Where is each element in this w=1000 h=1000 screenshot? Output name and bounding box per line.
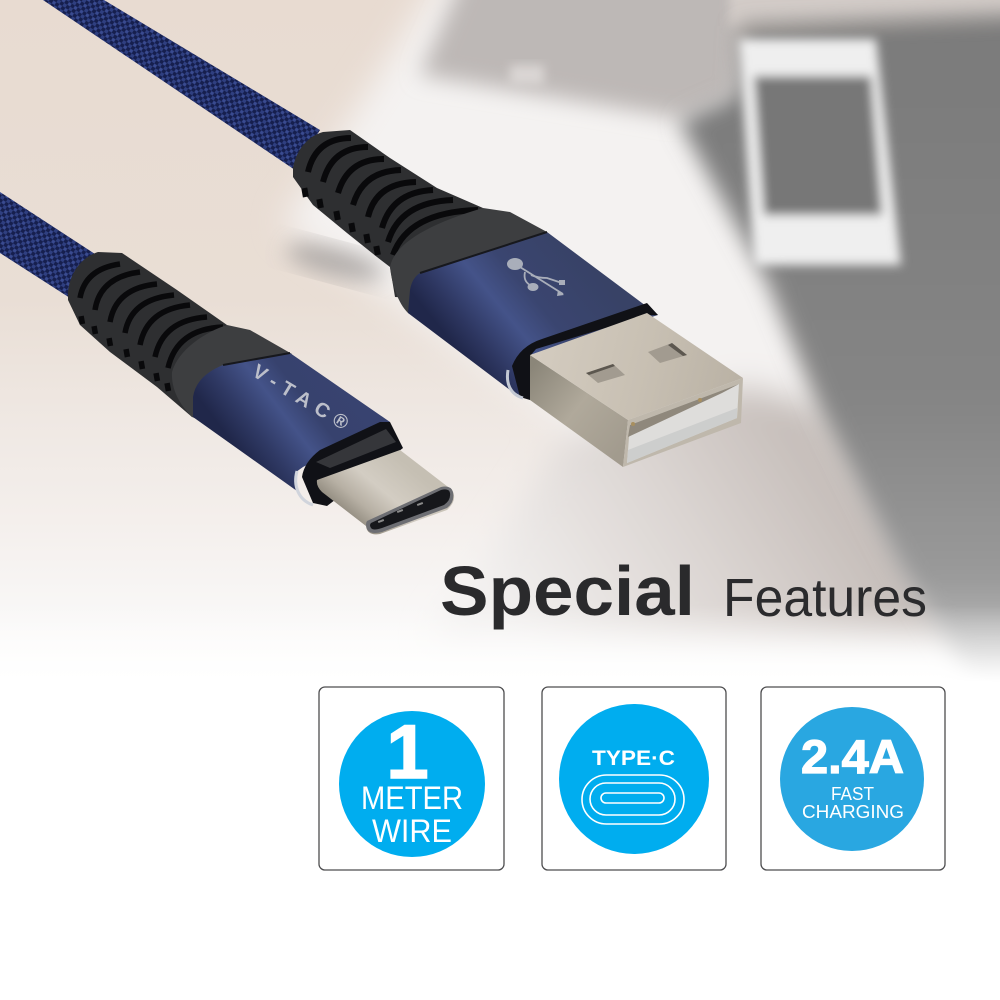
dark collar (390, 208, 547, 318)
braided cable: Type-C side (0, 192, 95, 298)
plug metal top (530, 313, 743, 420)
braided cable: USB side (43, 0, 320, 170)
strain relief boot (68, 252, 227, 417)
black gasket line and chrome ring (512, 303, 658, 400)
feature card: Type-C: TYPE·C (592, 747, 675, 770)
plug square holes (586, 343, 687, 383)
icon: Type-C port (582, 775, 684, 824)
icon: USB trident logo (507, 258, 565, 296)
USB-A connector (293, 130, 743, 467)
anodized metal shell (193, 353, 390, 491)
plug opening and white insert (623, 378, 743, 467)
shadow beneath USB connector (283, 236, 387, 288)
USB Type-C connector (68, 252, 454, 534)
feature card: Type-C (542, 687, 726, 870)
heading: Special (440, 552, 695, 630)
feature card: 2.4A fast charging: 2.4A (801, 730, 904, 783)
plug shell (317, 450, 454, 534)
anodized metal shell (408, 232, 658, 398)
feature card: 1 meter wire: 1 (386, 710, 429, 795)
feature card: 1 meter wire (319, 687, 504, 870)
black gasket and chrome ring (302, 422, 403, 506)
heading (440, 552, 927, 630)
feature card: 1 meter wire: METER (361, 780, 463, 816)
plug metal side (530, 355, 628, 467)
feature card: 2.4A fast charging (761, 687, 945, 870)
strain relief boot (293, 130, 483, 300)
V-TAC engraved logo: V-TAC® (248, 360, 353, 435)
feature card: 2.4A fast charging: CHARGING (802, 802, 904, 822)
dark collar (172, 325, 292, 420)
feature card: 2.4A fast charging: FAST (831, 784, 874, 804)
heading: Features (723, 568, 927, 628)
plug oval opening (366, 487, 453, 533)
feature card: 1 meter wire: WIRE (372, 813, 452, 849)
